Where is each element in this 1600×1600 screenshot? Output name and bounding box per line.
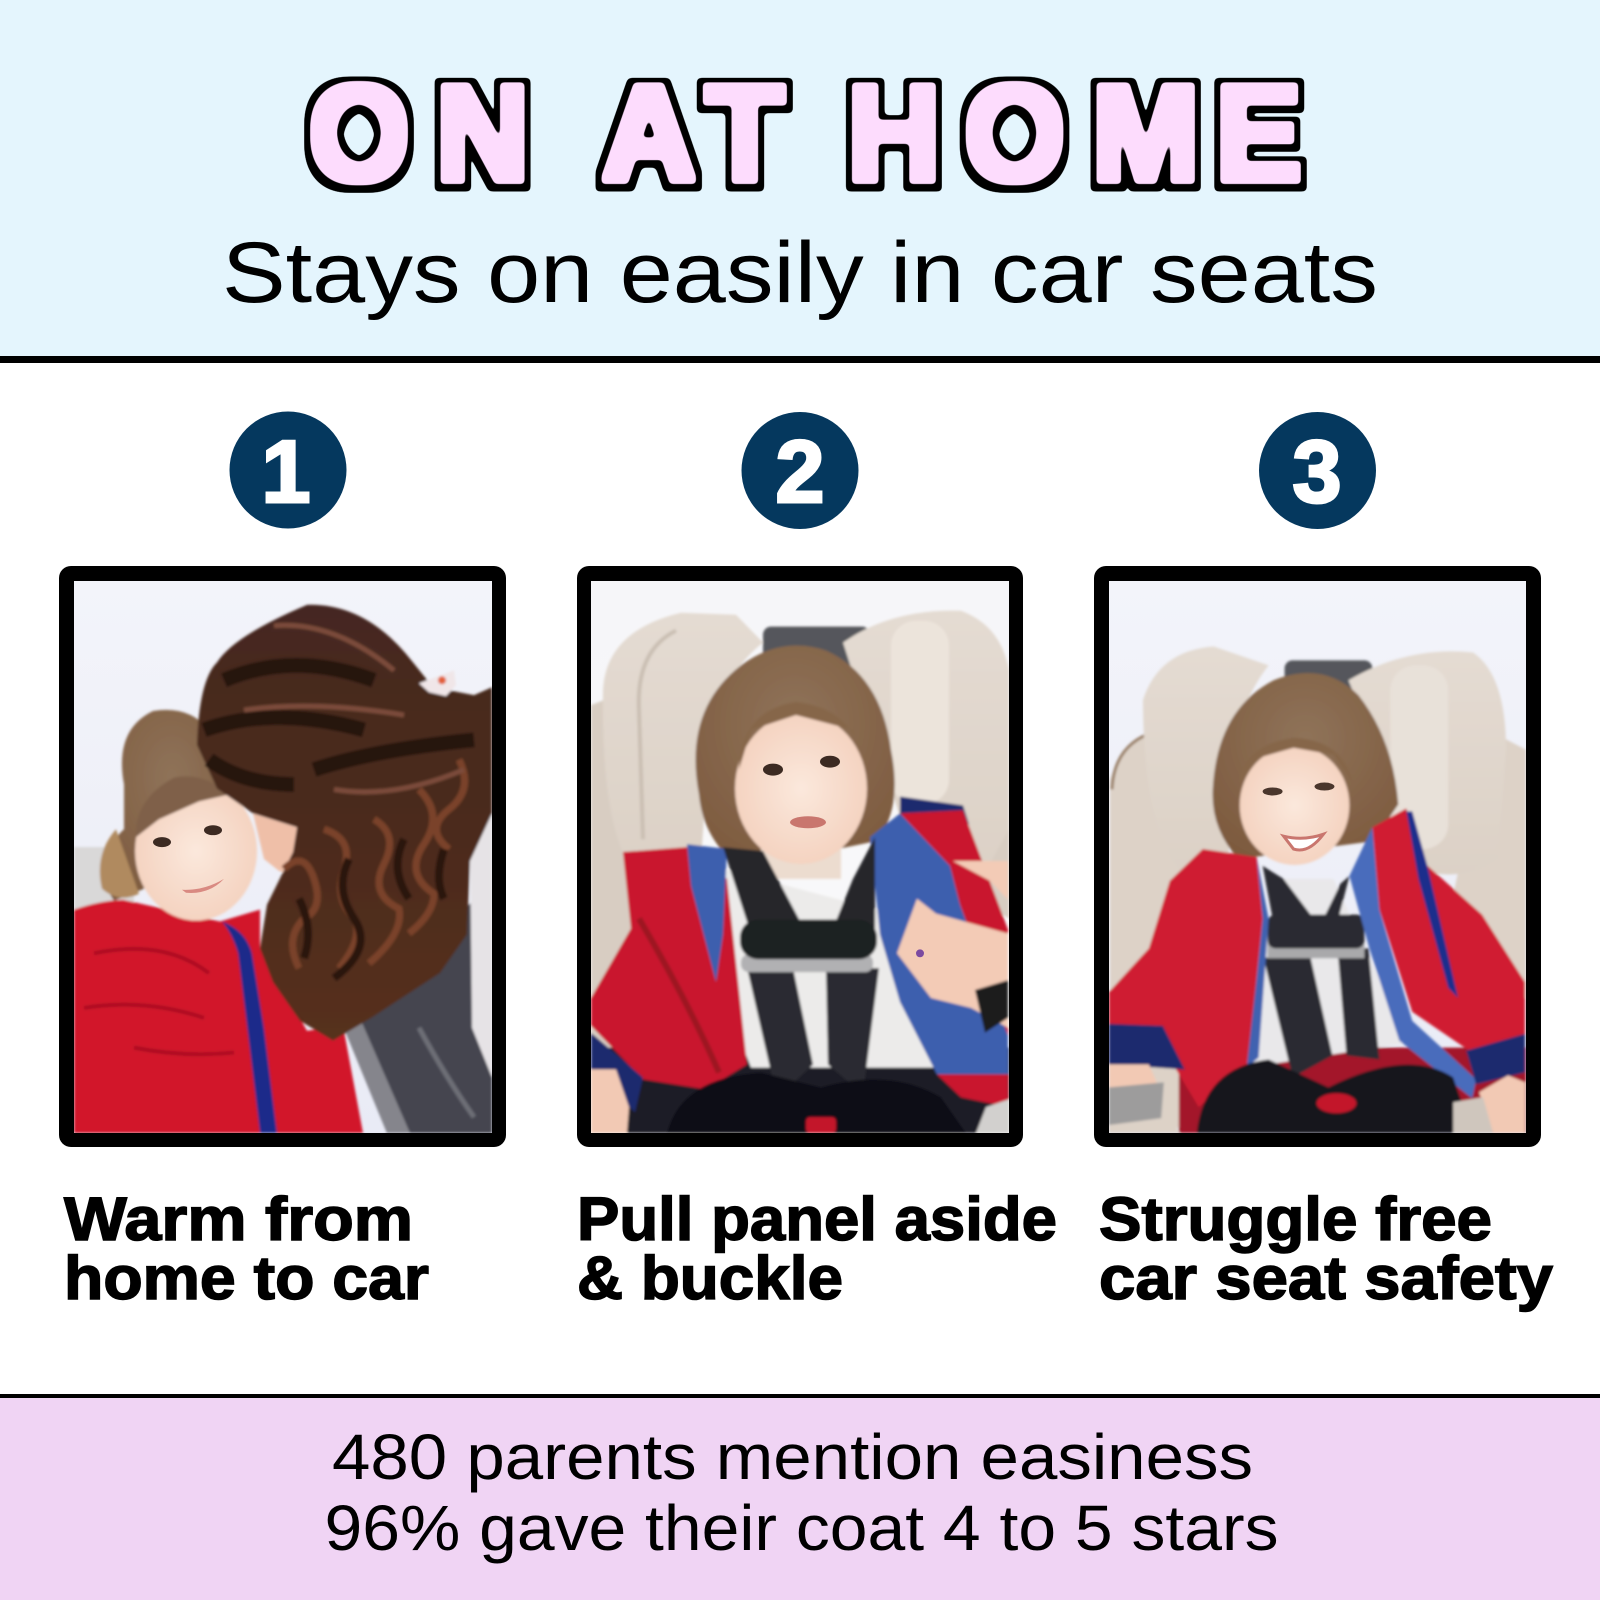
photo panel 3: child buckled in car seat [1094, 566, 1541, 1147]
caption 1: home to car [64, 1244, 429, 1312]
step number 3: 3 [1293, 422, 1341, 521]
step number 2: 2 [776, 422, 824, 521]
step number 1: 1 [262, 422, 310, 521]
caption 2 [577, 1185, 1057, 1312]
caption 2: Pull panel aside [577, 1185, 1057, 1253]
step number 1 [230, 412, 346, 528]
photo panel 2: pulling panel aside to buckle [577, 566, 1023, 1147]
photo panel 1: mother hugging child [59, 566, 506, 1147]
caption 1: Warm from [64, 1185, 413, 1253]
caption 3 [1099, 1185, 1553, 1312]
caption 3: Struggle free [1099, 1185, 1492, 1253]
step number 2 [742, 412, 858, 529]
step number 3 [1259, 412, 1376, 529]
footer panel [0, 1394, 1600, 1600]
footer stats text: 480 parents mention easiness [332, 1421, 1253, 1493]
subtitle: Stays on easily in car seats [222, 225, 1378, 321]
title: ON AT HOME [309, 58, 1302, 210]
caption 2: & buckle [577, 1244, 843, 1312]
footer stats text: 96% gave their coat 4 to 5 stars [324, 1492, 1278, 1564]
footer stats text [324, 1421, 1278, 1564]
caption 3: car seat safety [1099, 1244, 1553, 1312]
caption 1 [64, 1185, 429, 1312]
header panel [0, 0, 1600, 357]
